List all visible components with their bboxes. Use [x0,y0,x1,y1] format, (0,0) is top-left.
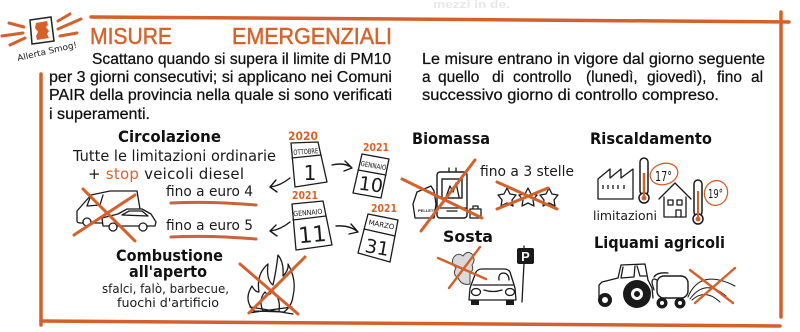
text: limitations [72,147,276,183]
icon: house with thermometer 19 [659,177,731,224]
label: fino a 3 stelle: fino a 3 stelle [480,164,574,180]
calendar: 31 marzo 2021: 2021 [371,202,397,215]
text: combustion examples [102,282,229,310]
calendar: 11 gennaio 2021: 11 [297,222,327,249]
text block: duration: quello [438,69,484,86]
text block: duration: Le misure entrano in vigore dal giorno seguente [422,51,765,68]
calendar: 1 ottobre 2020: 1 [304,161,316,185]
title: MISURE [90,23,172,49]
heading: sosta: Sosta [443,227,493,246]
panel: liquami agricoli [594,233,735,308]
icon: parking sign: P [521,249,530,264]
text block: duration: (lunedì, [586,69,642,86]
panel: circolazione [72,127,276,241]
text: combustion examples: fuochi d'artificio [117,296,219,310]
calendar: 10 gennaio 2021: 2021 [363,141,389,154]
panel: sosta [438,227,534,305]
text block: activation: Scattano quando si supera il limite di PM10 [92,51,391,68]
label: limitazioni: limitazioni [593,209,657,223]
text: limitations: Tutte le limitazioni ordinarie [72,147,276,165]
text block: duration: fino [717,69,746,86]
text: limitations: + stop veicoli diesel [88,165,244,183]
caption: allerta smog: Allerta Smog! [16,40,78,64]
label: euro 5: fino a euro 5 [166,218,253,234]
text: combustion examples: sfalci, falò, barbecue, [102,282,229,296]
calendar: 10 gennaio 2021: GENNAIO [360,160,387,172]
calendar: 31 marzo 2021: MARZO [368,219,395,232]
calendar: 10 gennaio 2021: 10 [357,172,384,198]
calendar: 31 marzo 2021: 31 [363,235,391,261]
arrows: dates [270,161,358,236]
panel: riscaldamento [590,129,731,224]
text block: duration: controllo [513,69,576,86]
icon: crossed stars [497,182,558,209]
icon: tractor with slurry tank [598,264,688,308]
calendar: 1 ottobre 2020: OTTOBRE [293,147,319,157]
calendar: 31 marzo 2021 [358,202,398,262]
icon: crossed vehicles [74,189,156,241]
heading: biomassa: Biomassa [412,129,490,148]
icon: crossed stove and pellets: PELLETS [418,208,436,213]
text block: duration [422,51,765,104]
heading: combustione: all'aperto [129,262,207,281]
icon: factory with thermometer 17: 17° [655,170,672,185]
icon: allerta smog [2,14,81,64]
calendar: 10 gennaio 2021 [353,141,389,198]
heading: liquami agricoli: Liquami agricoli [594,233,725,252]
text block: duration: a [422,69,435,86]
calendar: 11 gennaio 2021 [292,189,332,250]
panel: biomassa [402,129,574,231]
icon: crossed stove and pellets [402,160,482,231]
text block: activation: per 3 giorni consecutivi; si applicano nei Comuni [49,69,392,86]
text block: duration: di [492,69,508,86]
calendar: 1 ottobre 2020: 2020 [288,129,318,143]
title: EMERGENZIALI [232,23,392,49]
label: euro 4: fino a euro 4 [166,184,253,200]
heading: riscaldamento: Riscaldamento [590,129,712,148]
calendar: 11 gennaio 2021: GENNAIO [293,208,323,218]
icon: crossed campfire [240,255,305,314]
title [90,23,392,49]
text block: duration: successivo giorno di controllo compreso. [422,87,719,104]
heading: combustione: Combustione [116,246,223,265]
icon: house with thermometer 19: 19° [708,187,723,201]
text block: activation [49,51,392,123]
text block: duration: al [751,69,763,86]
heading: circolazione: Circolazione [118,127,221,146]
panel: combustione all'aperto [102,246,305,314]
text block: duration: giovedì), [647,69,711,86]
text block: activation: i superamenti. [49,106,150,123]
icon: factory with thermometer 17 [598,158,680,203]
calendar: 11 gennaio 2021: 2021 [292,189,318,202]
heading: combustione [116,246,223,281]
icon: crossed spray [688,268,735,303]
text block: activation: PAIR della provincia nella quale si sono verificati [49,87,392,104]
calendar: 1 ottobre 2020 [288,129,327,187]
